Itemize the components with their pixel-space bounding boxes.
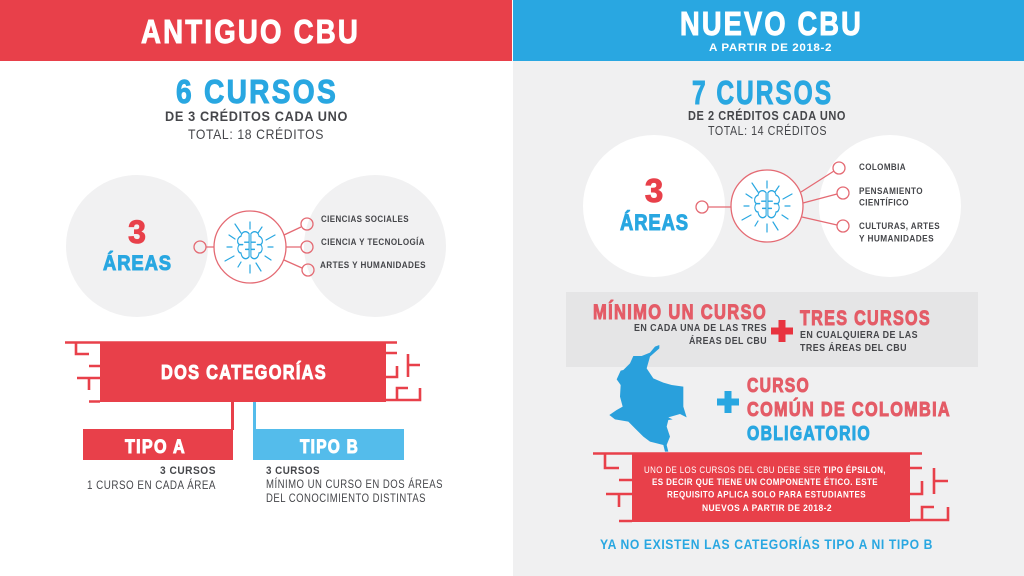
connectors <box>708 171 837 225</box>
text: area names <box>859 162 940 244</box>
text: tipo B description: 3 CURSOS <box>266 465 320 477</box>
circle: 3 areas <box>66 175 208 317</box>
text: curso comun de colombia obligatorio: CURSO <box>747 375 810 397</box>
circle: area list <box>304 175 446 317</box>
text: minimo un curso: ÁREAS DEL CBU <box>689 334 767 347</box>
header: nuevo CBU <box>513 0 1024 61</box>
box: tipo A: TIPO A <box>125 437 186 458</box>
heading: 3 areas: 3 <box>645 172 663 209</box>
text: area names: CULTURAS, ARTES <box>859 221 940 232</box>
diagram: 3 areas nuevo <box>583 135 961 277</box>
connector nodes <box>194 218 314 276</box>
text block: 6 cursos: 6 CURSOS <box>176 73 338 110</box>
text: tipo B description: DEL CONOCIMIENTO DISTINTAS <box>266 493 426 505</box>
text: curso comun de colombia obligatorio: OBLIGATORIO <box>747 423 871 445</box>
text: tres cursos <box>800 307 931 354</box>
diagram: 3 areas antiguo <box>66 175 446 317</box>
text block: 6 cursos: DE 3 CRÉDITOS CADA UNO <box>165 108 348 124</box>
connector nodes <box>696 162 849 232</box>
text: tipo A description <box>87 465 216 492</box>
heading: 3 areas: ÁREAS <box>103 252 172 275</box>
text: area names: CIENTÍFICO <box>859 198 909 208</box>
text: curso comun de colombia obligatorio: COMÚN DE COLOMBIA <box>747 397 951 421</box>
panel: right background <box>513 0 1024 576</box>
text block: 7 cursos: 7 CURSOS <box>692 74 833 111</box>
box: tipo A <box>83 402 234 460</box>
text: area names: PENSAMIENTO <box>859 186 923 197</box>
icon: blue plus <box>717 391 739 413</box>
text: minimo un curso: EN CADA UNA DE LAS TRES <box>634 322 767 334</box>
text: area names: Y HUMANIDADES <box>859 234 934 244</box>
map: Colombia <box>609 345 687 452</box>
text: area names: ARTES Y HUMANIDADES <box>320 260 426 271</box>
text block: 6 cursos: TOTAL: 18 CRÉDITOS <box>188 126 324 142</box>
panel: course requirements <box>566 292 978 367</box>
text: area names <box>320 214 426 271</box>
text: curso comun de colombia obligatorio <box>747 375 951 445</box>
banner: tipo epsilon <box>593 453 948 522</box>
text: tipo B description <box>266 465 443 505</box>
text: area names: COLOMBIA <box>859 162 906 173</box>
heading: 3 areas <box>103 214 172 275</box>
text: minimo un curso: MÍNIMO UN CURSO <box>593 301 767 324</box>
heading: 3 areas: 3 <box>128 214 146 250</box>
heading: 3 areas <box>620 172 689 235</box>
text: area names: CIENCIA Y TECNOLOGÍA <box>321 237 425 248</box>
text: tipo B description: MÍNIMO UN CURSO EN DOS ÁREAS <box>266 478 443 491</box>
banner: tipo epsilon: UNO DE LOS CURSOS DEL CBU DEBE SER TIPO ÉPSILON, <box>644 465 886 475</box>
text: tres cursos: TRES CURSOS <box>800 307 931 330</box>
icon: red plus <box>771 320 793 342</box>
banner: dos categorias: DOS CATEGORÍAS <box>161 361 327 384</box>
text: tres cursos: TRES ÁREAS DEL CBU <box>800 341 907 354</box>
header: antiguo CBU <box>0 0 512 61</box>
banner: dos categorias <box>65 342 420 402</box>
header: antiguo CBU: ANTIGUO CBU <box>141 13 360 50</box>
icon: brain <box>731 170 803 242</box>
header: nuevo CBU: A PARTIR DE 2018-2 <box>709 42 832 54</box>
text: tres cursos: EN CUALQUIERA DE LAS <box>800 329 918 341</box>
text: area names: CIENCIAS SOCIALES <box>321 214 409 225</box>
text block: 7 cursos <box>688 74 846 138</box>
text block: 7 cursos: TOTAL: 14 CRÉDITOS <box>708 123 827 138</box>
circle: area list <box>819 135 961 277</box>
text block: 7 cursos: DE 2 CRÉDITOS CADA UNO <box>688 108 846 123</box>
connectors <box>206 227 302 268</box>
banner: tipo epsilon: NUEVOS A PARTIR DE 2018-2 <box>702 503 832 513</box>
banner: tipo epsilon: REQUISITO APLICA SOLO PARA ESTUDIANTES <box>667 490 866 500</box>
banner: tipo epsilon: ES DECIR QUE TIENE UN COMPONENTE ÉTICO. ESTE <box>652 477 878 487</box>
box: tipo B: TIPO B <box>300 437 359 458</box>
heading: 3 areas: ÁREAS <box>620 210 689 235</box>
header: nuevo CBU: NUEVO CBU <box>680 5 863 42</box>
box: tipo B <box>253 402 404 460</box>
text: ya no existen categorias: YA NO EXISTEN LAS CATEGORÍAS TIPO A NI TIPO B <box>600 536 933 552</box>
circle: 3 areas <box>583 135 725 277</box>
icon: brain <box>214 211 286 283</box>
text: tipo A description: 1 CURSO EN CADA ÁREA <box>87 479 216 492</box>
text block: 6 cursos <box>165 73 348 142</box>
text: tipo A description: 3 CURSOS <box>160 465 216 477</box>
text: minimo un curso <box>593 301 767 347</box>
